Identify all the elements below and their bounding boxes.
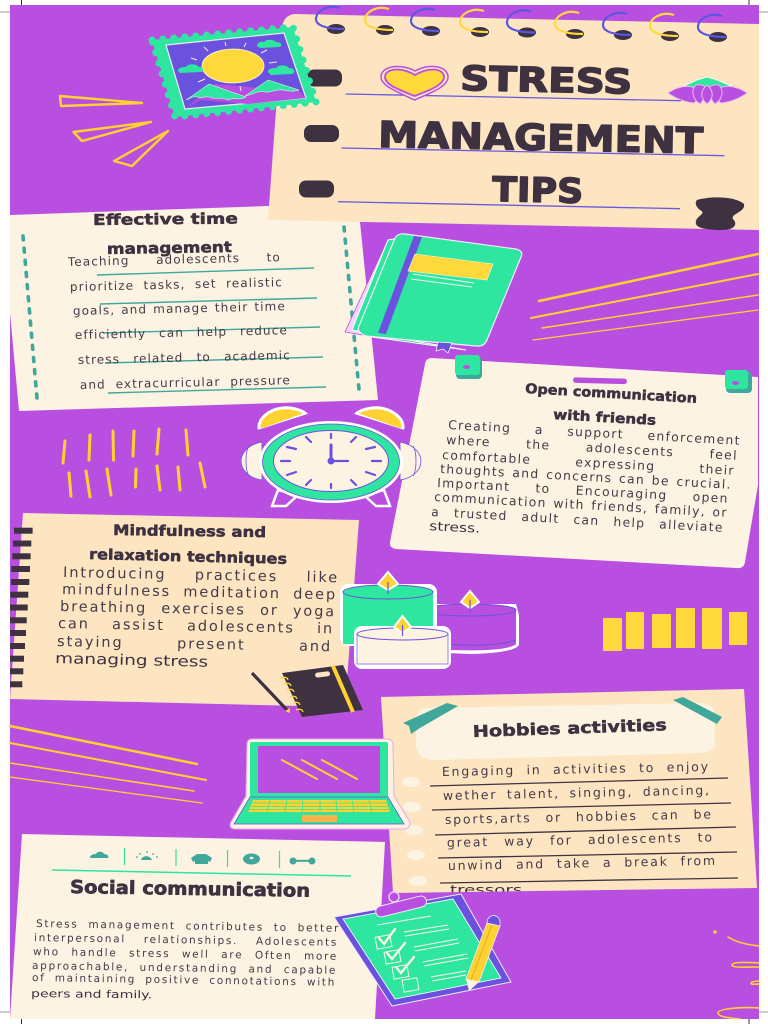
title: stress management tips: TIPS (492, 170, 584, 212)
title: stress management tips: MANAGEMENT (378, 115, 704, 162)
binding dots (23, 227, 360, 404)
body text: mindfulness (55, 563, 339, 671)
body text: mindfulness: managing stress (55, 651, 208, 671)
heading: effective time management: management (107, 238, 232, 258)
margin dots (402, 777, 427, 886)
marks: yellow blocks (603, 608, 747, 651)
body text: time management: efficiently can help reduce (75, 323, 288, 342)
ruled lines (430, 778, 738, 883)
spiral bars (10, 528, 33, 687)
body text: open communication: communication with friends, family, or (434, 489, 728, 520)
marks: yellow ticks (63, 429, 205, 497)
teal tapes (403, 697, 722, 734)
heading: mindfulness: relaxation techniques (89, 547, 287, 568)
heading: open communication: with friends (553, 407, 657, 429)
panel: title notepad (268, 7, 759, 230)
title: stress management tips (378, 59, 704, 212)
heading: social communication: Social communication (70, 877, 310, 902)
body text: hobbies: unwind and take a break from (448, 853, 717, 873)
body text: hobbies (442, 758, 717, 897)
body text: mindfulness: can assist adolescents in (58, 616, 334, 637)
body text: social communication: approachable, understanding and capable (32, 960, 337, 977)
clock ticks (281, 434, 381, 488)
body text: time management: and extracurricular pressure (80, 373, 291, 392)
icon: candles (340, 572, 519, 669)
heading: hobbies activities: Hobbies activities (472, 715, 667, 741)
panel: mindfulness and relaxation techniques (10, 513, 359, 707)
panel: hobbies activities (381, 689, 757, 897)
icon: laptop (230, 739, 410, 829)
body text: social communication (31, 915, 340, 1001)
spiral rings (316, 7, 727, 42)
heading: mindfulness (89, 523, 287, 568)
body text: social communication: peers and family. (31, 988, 152, 1001)
icon: lotus (668, 77, 747, 104)
panel: social communication (10, 834, 385, 1019)
body text: time management: stress related to academic (78, 348, 291, 367)
title: stress management tips: STRESS (460, 59, 633, 103)
punch holes (299, 70, 342, 198)
icon: green notebook (345, 234, 522, 353)
pencil (466, 916, 500, 991)
body text: open communication: where the adolescents feel (446, 432, 738, 463)
heading: open communication: Open communication (525, 381, 697, 407)
body text: hobbies: wether talent, singing, dancing, (443, 782, 711, 803)
body text: open communication: comfortable expressing their (442, 447, 735, 478)
body text: social communication: of maintaining positive connotations with (32, 972, 336, 989)
white candle (354, 616, 451, 669)
body text: open communication: stress. (429, 518, 481, 536)
heading: open communication (525, 381, 697, 429)
panel: open communication with friends (390, 355, 758, 568)
body text: mindfulness: Introducing practices like (63, 565, 339, 586)
green candle (340, 572, 437, 646)
panel: effective time management (10, 206, 378, 411)
heading: effective time management: Effective time (93, 209, 238, 229)
body text: hobbies: tressors. (450, 882, 528, 897)
decoration: bottom right squiggles (714, 931, 760, 1019)
icon: alarm clock (241, 408, 421, 506)
icon: clipboard (334, 892, 511, 1006)
body text: social communication: Stress management contributes to better (36, 918, 340, 935)
icon: black notebook and pen (252, 665, 363, 717)
body text: open communication: thoughts and concerns can be crucial. (440, 461, 732, 492)
body text: mindfulness: breathing exercises or yoga (60, 599, 336, 620)
body text: open communication: a trusted adult can help alleviate (431, 504, 724, 535)
ink blob (696, 197, 744, 230)
clock side wings (241, 442, 421, 480)
body text: mindfulness: staying present and (57, 634, 332, 655)
icon: sun stamp (152, 27, 316, 117)
body text: social communication: who handle stress well are Often more (33, 946, 338, 963)
purple candle (424, 591, 519, 654)
body text: open communication: Important to Encouraging open (437, 475, 729, 506)
body text: time management: prioritize tasks, set realistic (70, 275, 283, 294)
body text: hobbies: Engaging in activities to enjoy (442, 759, 710, 779)
clock hands (328, 445, 348, 464)
body text: open communication: Creating a support enforcement (448, 417, 741, 448)
body text: time management: goals, and manage their time (73, 299, 286, 318)
body text: hobbies: great way for adolescents to (447, 829, 714, 850)
laptop keys (248, 800, 390, 812)
heading banner (416, 703, 715, 760)
lines: upper right yellow (531, 254, 758, 340)
heading: effective time management (93, 209, 238, 258)
body text: time management (68, 248, 291, 394)
body text: time management: Teaching adolescents to (68, 250, 281, 269)
rays: yellow triangles (60, 96, 168, 166)
title rules (338, 94, 724, 209)
icon row (90, 851, 316, 864)
body text: social communication: interpersonal relationships. Adolescents (34, 932, 338, 949)
body text: hobbies: sports,arts or hobbies can be (445, 806, 713, 827)
icon dividers (52, 848, 351, 876)
icon: heart (381, 66, 448, 100)
lines: left yellow (10, 726, 206, 803)
tape clips (455, 355, 752, 393)
heading: mindfulness: Mindfulness and (113, 523, 266, 541)
body text: mindfulness: mindfulness meditation deep (62, 582, 337, 603)
body text: open communication (429, 416, 741, 537)
ruled lines (97, 268, 326, 393)
